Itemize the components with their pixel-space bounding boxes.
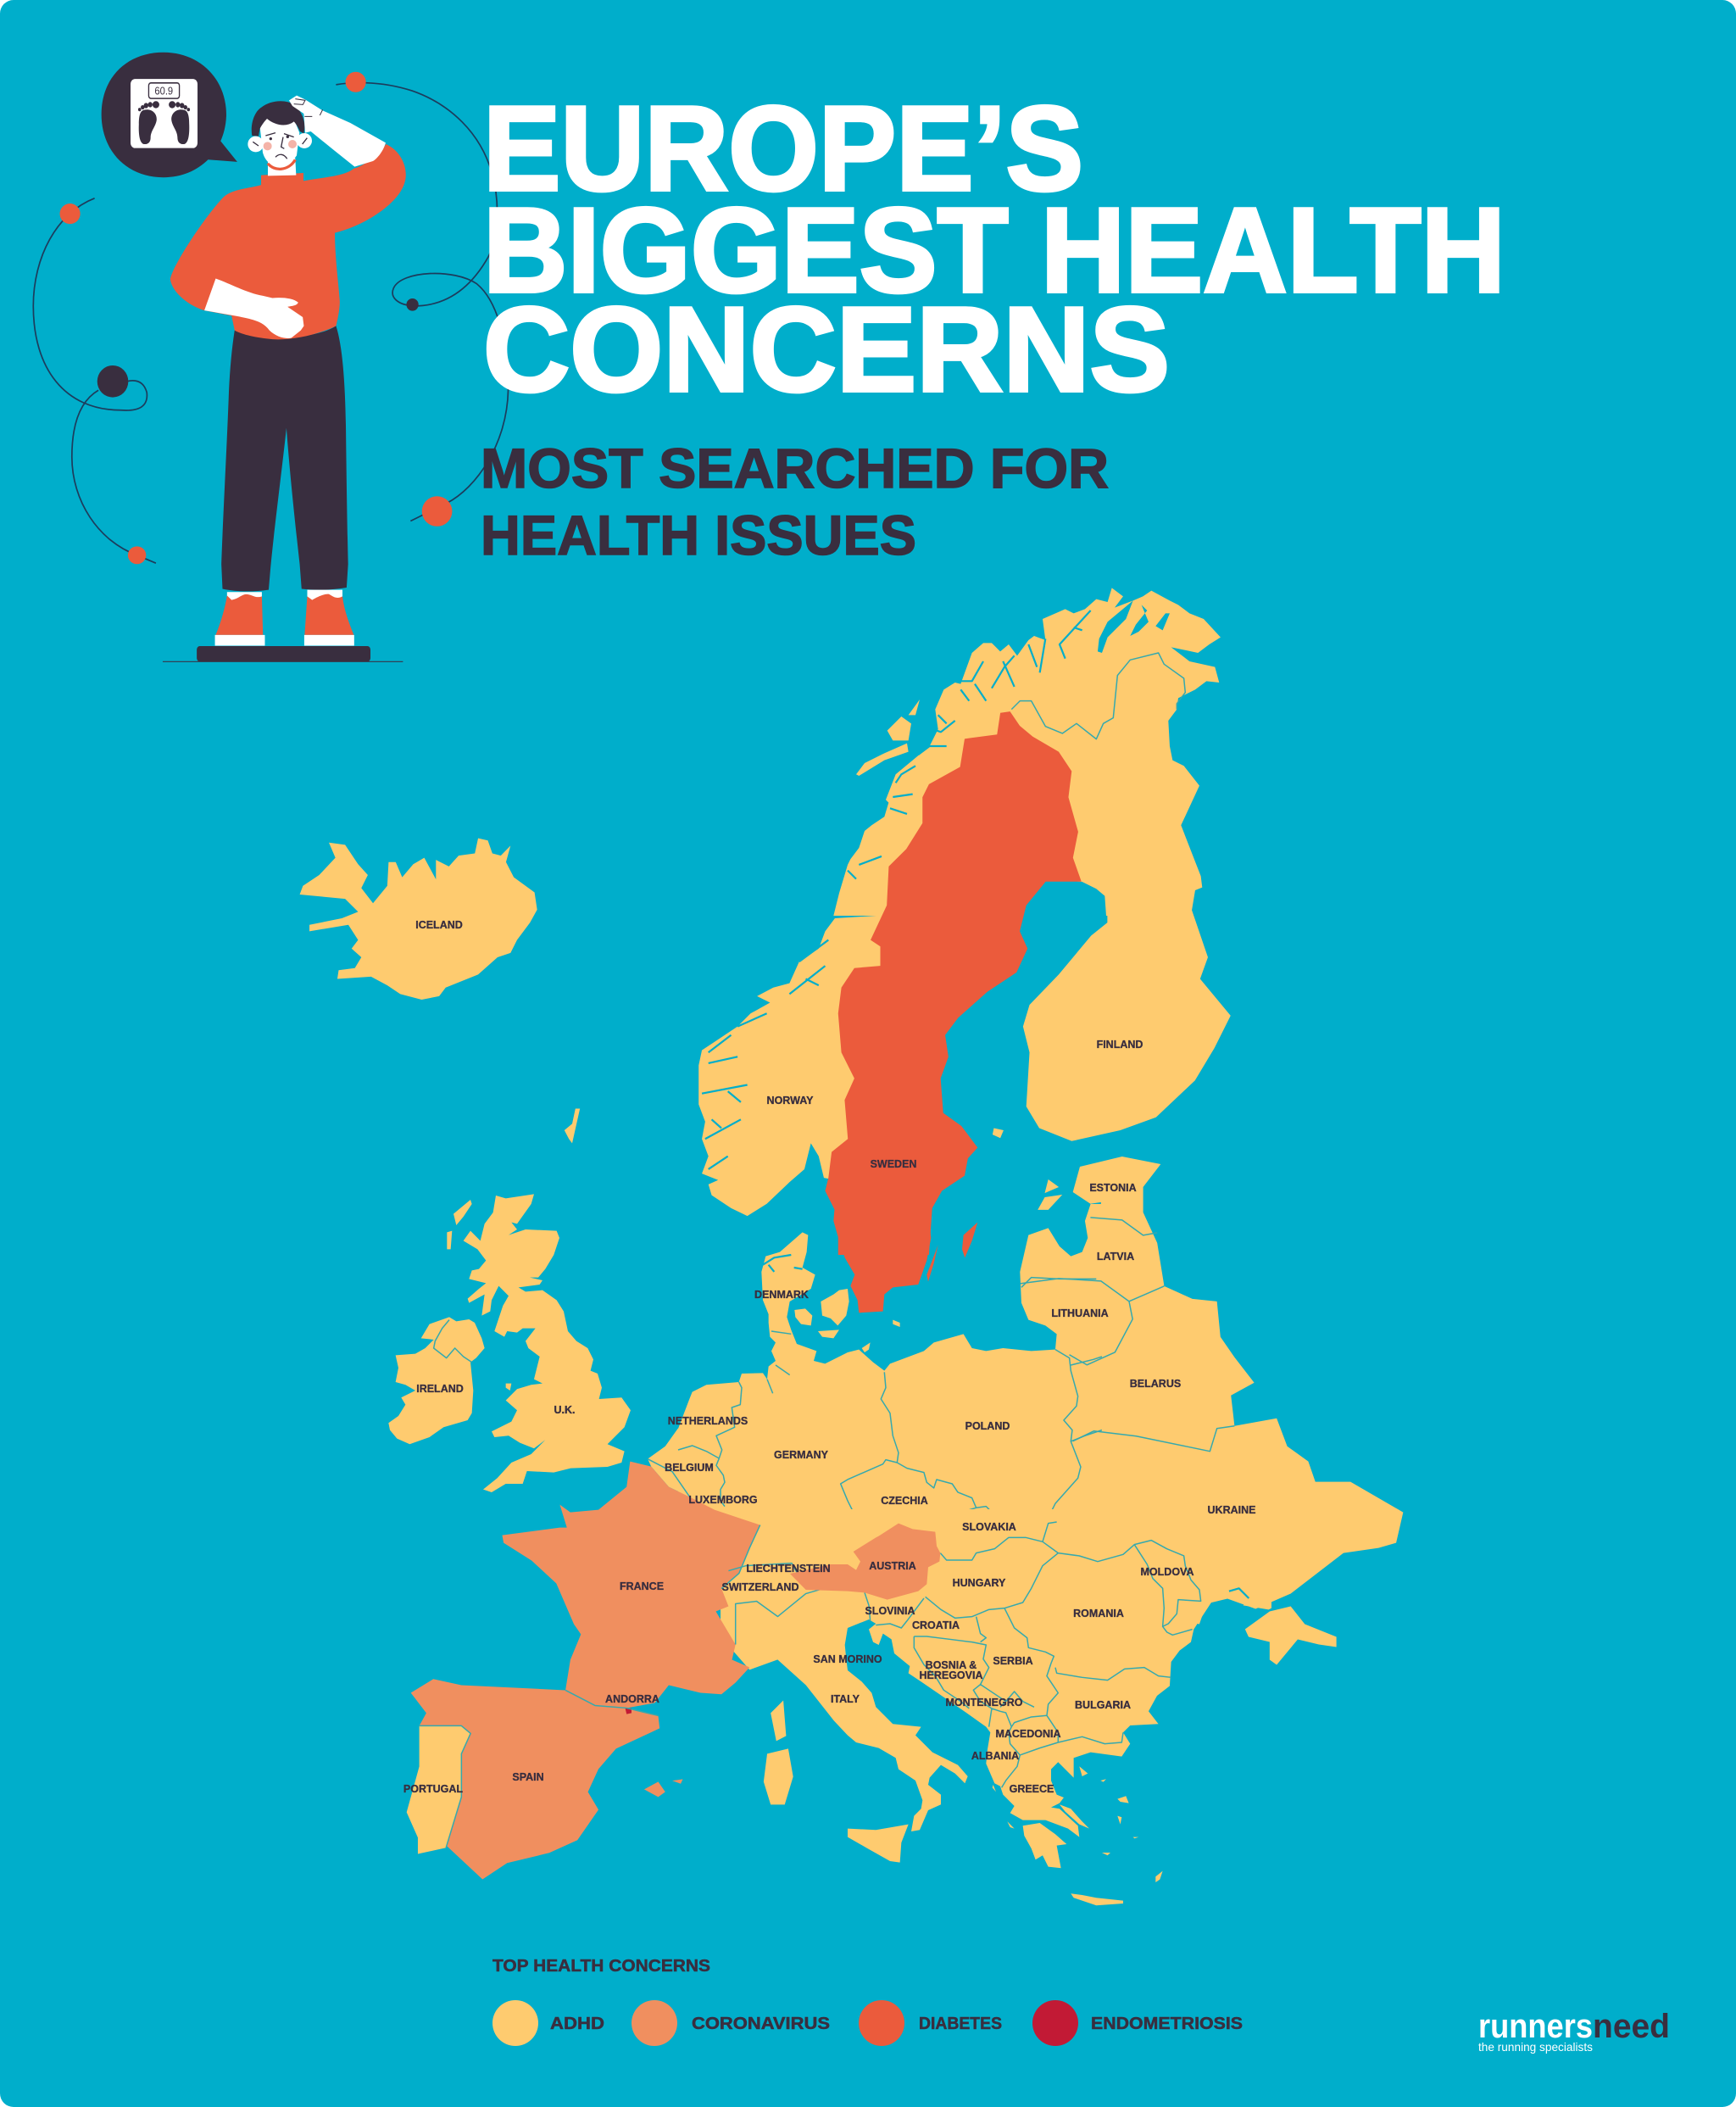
map: country labels: FRANCE xyxy=(620,1580,664,1592)
map: country labels: ITALY xyxy=(831,1693,860,1705)
speech bubble with weighing scale icon xyxy=(102,53,237,177)
map: Austria xyxy=(790,1524,940,1600)
map: country labels: LITHUANIA xyxy=(1051,1307,1109,1319)
title: EUROPE’S xyxy=(483,81,1083,216)
legend item: ADHD xyxy=(492,2000,604,2046)
map: country labels: SWITZERLAND xyxy=(722,1581,798,1593)
map: country labels: ROMANIA xyxy=(1073,1608,1124,1619)
Peloponnese, Sicily and Greek islands xyxy=(848,1766,1163,1905)
Estonia Latvia Belarus Ukraine xyxy=(1059,1157,1403,1625)
western borders xyxy=(420,1218,1234,1848)
Danish islands xyxy=(794,1289,900,1352)
map: country labels: MACEDONIA xyxy=(995,1728,1061,1740)
fjord inlets xyxy=(848,610,1091,879)
map: country labels: SERBIA xyxy=(993,1655,1033,1667)
map: country labels: MOLDOVA xyxy=(1141,1566,1194,1578)
map: country labels: SWEDEN xyxy=(871,1158,916,1170)
legend item: Coronavirus xyxy=(632,2000,830,2046)
Finland south xyxy=(1023,910,1231,1141)
illustration: worried man on scales xyxy=(33,53,509,662)
title: BIGGEST HEALTH xyxy=(483,183,1505,318)
map: country labels: SLOVAKIA xyxy=(962,1521,1016,1533)
northern fjords xyxy=(1098,600,1170,653)
map: country labels: FINLAND xyxy=(1097,1039,1143,1051)
Norway south xyxy=(698,914,903,1216)
head and raised arm xyxy=(248,96,386,176)
subtitle: MOST SEARCHED FOR xyxy=(481,437,1109,499)
map: country labels: ALBANIA xyxy=(971,1750,1019,1762)
Corsica and Sardinia xyxy=(764,1700,793,1804)
map: country labels: BOSNIA & xyxy=(926,1659,976,1671)
map: country labels: AUSTRIA xyxy=(869,1560,916,1572)
map: country labels: CROATIA xyxy=(912,1619,960,1631)
Ireland xyxy=(388,1317,485,1444)
Black Sea lagoon xyxy=(1229,1588,1249,1598)
map: western and southern countries xyxy=(407,1218,1234,1879)
map: country labels: MONTENEGRO xyxy=(946,1697,1023,1708)
logo: runners need xyxy=(1478,2008,1670,2054)
map: country labels: LATVIA xyxy=(1097,1251,1134,1263)
map: country labels: HEREGOVIA xyxy=(919,1669,983,1681)
title xyxy=(483,81,1505,417)
decorative orbit: left xyxy=(33,198,156,564)
bathroom scale under feet xyxy=(163,646,403,662)
logo: runners need: need xyxy=(1593,2008,1670,2045)
map: Balkans and Italy xyxy=(721,1509,1271,1905)
map: country labels: BELARUS xyxy=(1130,1378,1181,1390)
map: eastern Europe xyxy=(648,1157,1403,1664)
Danish inlets xyxy=(763,1255,803,1272)
Norwegian fjords south xyxy=(702,940,828,1169)
map: country labels: PORTUGAL xyxy=(403,1783,463,1795)
subtitle xyxy=(481,437,1109,566)
map: country labels xyxy=(403,919,1255,1795)
Iceland xyxy=(300,839,537,1000)
map: country labels: LIECHTENSTEIN xyxy=(746,1563,831,1575)
hand on belly xyxy=(204,278,303,338)
legend item: Endometriosis: ENDOMETRIOSIS xyxy=(1091,2015,1243,2033)
map: British Isles xyxy=(388,1194,631,1492)
Great Britain xyxy=(447,1194,631,1492)
map: country labels: DENMARK xyxy=(754,1289,809,1301)
title: CONCERNS xyxy=(483,282,1170,417)
map: country labels: UKRAINE xyxy=(1208,1504,1255,1516)
map: country labels: ICELAND xyxy=(415,919,463,931)
map: Iceland, south Norway, south Finland xyxy=(300,839,1231,1216)
Lofoten and coastal islands xyxy=(856,700,920,776)
Germany Poland Benelux Denmark Baltics xyxy=(678,1204,1102,1543)
Gotland and Oland xyxy=(926,1223,977,1282)
legend heading: TOP HEALTH CONCERNS xyxy=(492,1957,710,1976)
map: country labels: CZECHIA xyxy=(881,1495,928,1507)
map: country labels: U.K. xyxy=(554,1404,575,1416)
map: country labels: ANDORRA xyxy=(605,1693,659,1705)
map: country labels: GREECE xyxy=(1010,1783,1054,1795)
body: orange jumper xyxy=(170,144,406,339)
subtitle: HEALTH ISSUES xyxy=(481,504,916,566)
Norway Finland border xyxy=(1011,653,1185,739)
Sweden south xyxy=(833,1204,932,1313)
map of Europe xyxy=(300,588,1403,1905)
Balkan peninsula xyxy=(833,1509,1271,1837)
map: country labels: POLAND xyxy=(965,1420,1010,1432)
map: country labels: NORWAY xyxy=(767,1095,814,1106)
map: central Europe and Denmark xyxy=(678,1204,1102,1543)
speech bubble with weighing scale icon: 60.9 xyxy=(154,85,173,98)
map: country labels: HUNGARY xyxy=(953,1577,1006,1589)
legend item: Coronavirus: CORONAVIRUS xyxy=(692,2015,830,2033)
map: north Norway and Lapland xyxy=(833,588,1221,916)
Belgium and Netherlands coast xyxy=(648,1429,721,1523)
map: country labels: BULGARIA xyxy=(1075,1699,1131,1711)
legend xyxy=(492,1957,1243,2046)
Italy and Alpine region xyxy=(721,1537,968,1831)
Faroe and Aland islands xyxy=(565,1109,1004,1143)
logo: runners need: runners xyxy=(1478,2008,1593,2045)
map: country labels: BELGIUM xyxy=(665,1462,714,1474)
Northern Ireland border xyxy=(434,1320,472,1363)
map: country labels: ESTONIA xyxy=(1089,1182,1137,1194)
logo: runners need: the running specialists xyxy=(1478,2040,1593,2054)
legend item: ADHD: ADHD xyxy=(550,2015,604,2033)
map: country labels: SLOVINIA xyxy=(865,1605,915,1617)
Andorra xyxy=(626,1708,632,1714)
map: country labels: IRELAND xyxy=(416,1383,464,1395)
Norway and Finland north xyxy=(833,588,1221,916)
decorative orbit: right xyxy=(336,72,509,527)
map: country labels: NETHERLANDS xyxy=(668,1415,748,1427)
map: country labels: SPAIN xyxy=(512,1771,544,1783)
central European borders xyxy=(678,1278,1102,1536)
map: country labels: SAN MORINO xyxy=(813,1653,882,1665)
legend item: Endometriosis xyxy=(1032,2000,1243,2046)
Portugal xyxy=(407,1725,470,1853)
map: Sweden north xyxy=(825,711,1082,1255)
Spain xyxy=(411,1679,683,1879)
Balkan borders xyxy=(865,1522,1201,1787)
shoes xyxy=(215,590,354,645)
trousers xyxy=(221,326,348,591)
Crimea and Estonian islands xyxy=(1038,1179,1337,1664)
map: country labels: GERMANY xyxy=(774,1449,829,1461)
map: country labels: LUXEMBORG xyxy=(688,1494,758,1506)
France xyxy=(502,1462,760,1708)
legend item: Diabetes: DIABETES xyxy=(919,2015,1002,2033)
legend item: Diabetes xyxy=(859,2000,1002,2046)
